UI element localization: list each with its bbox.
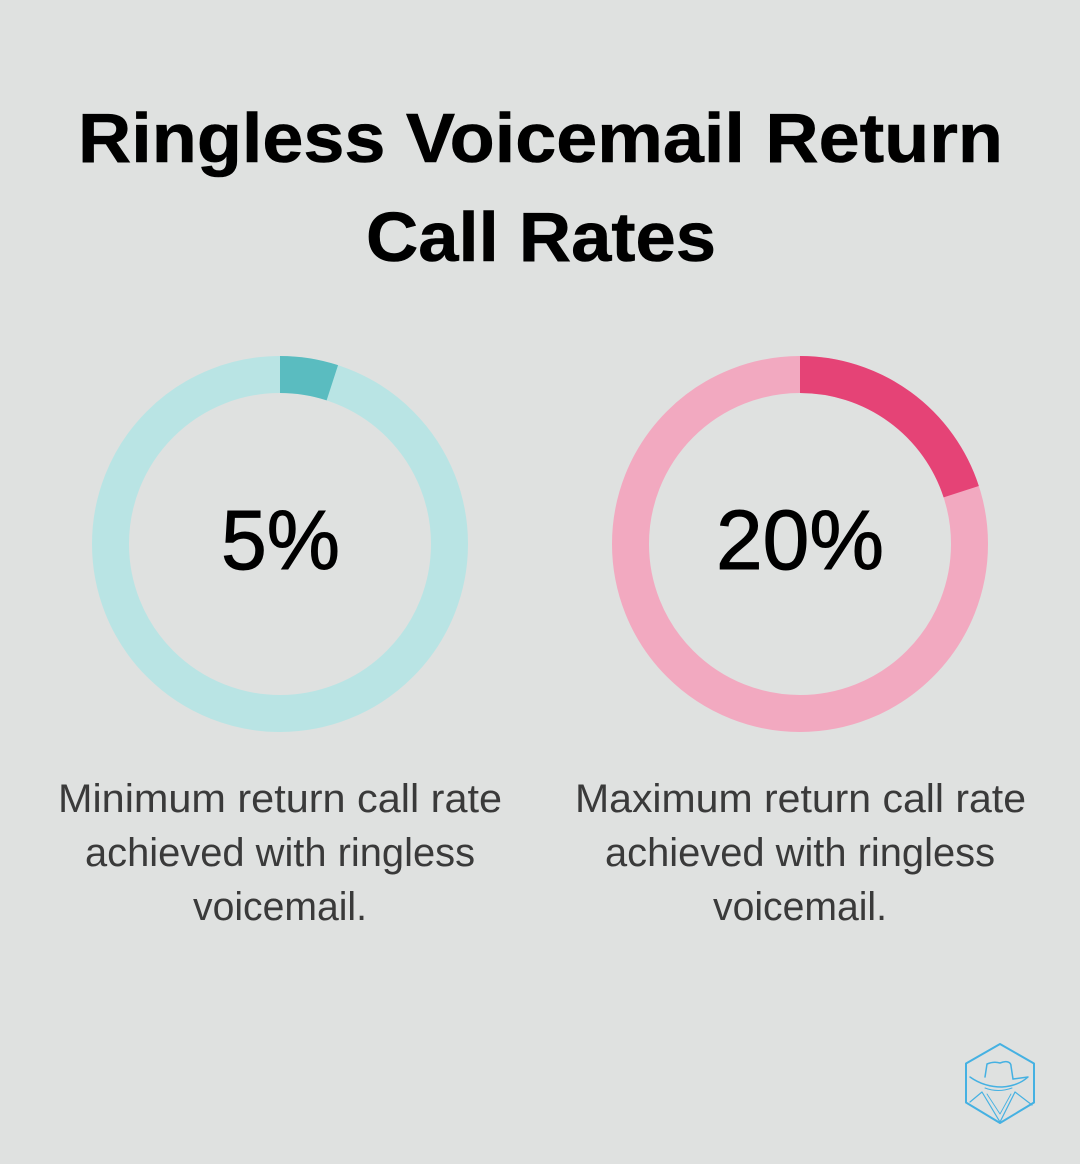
panel: minimum rate [58,374,502,929]
title [78,99,1003,276]
description: minimum: Minimum return call rate [58,777,502,821]
value: 20%: 20% [716,493,884,587]
description: maximum [575,777,1026,929]
description: minimum: voicemail. [193,885,367,929]
description: maximum: Maximum return call rate [575,777,1026,821]
description: minimum [58,777,502,929]
panel: maximum rate [575,374,1026,929]
description: minimum: achieved with ringless [85,831,475,875]
description: maximum: achieved with ringless [605,831,995,875]
icon: logo hexagon with hat [966,1044,1034,1123]
description: maximum: voicemail. [713,885,887,929]
donut chart: 5% [110,374,450,714]
title: Call Rates [366,198,716,276]
value: 5%: 5% [221,493,340,587]
title: Ringless Voicemail Return [78,99,1003,177]
donut chart: 20% [630,374,970,714]
